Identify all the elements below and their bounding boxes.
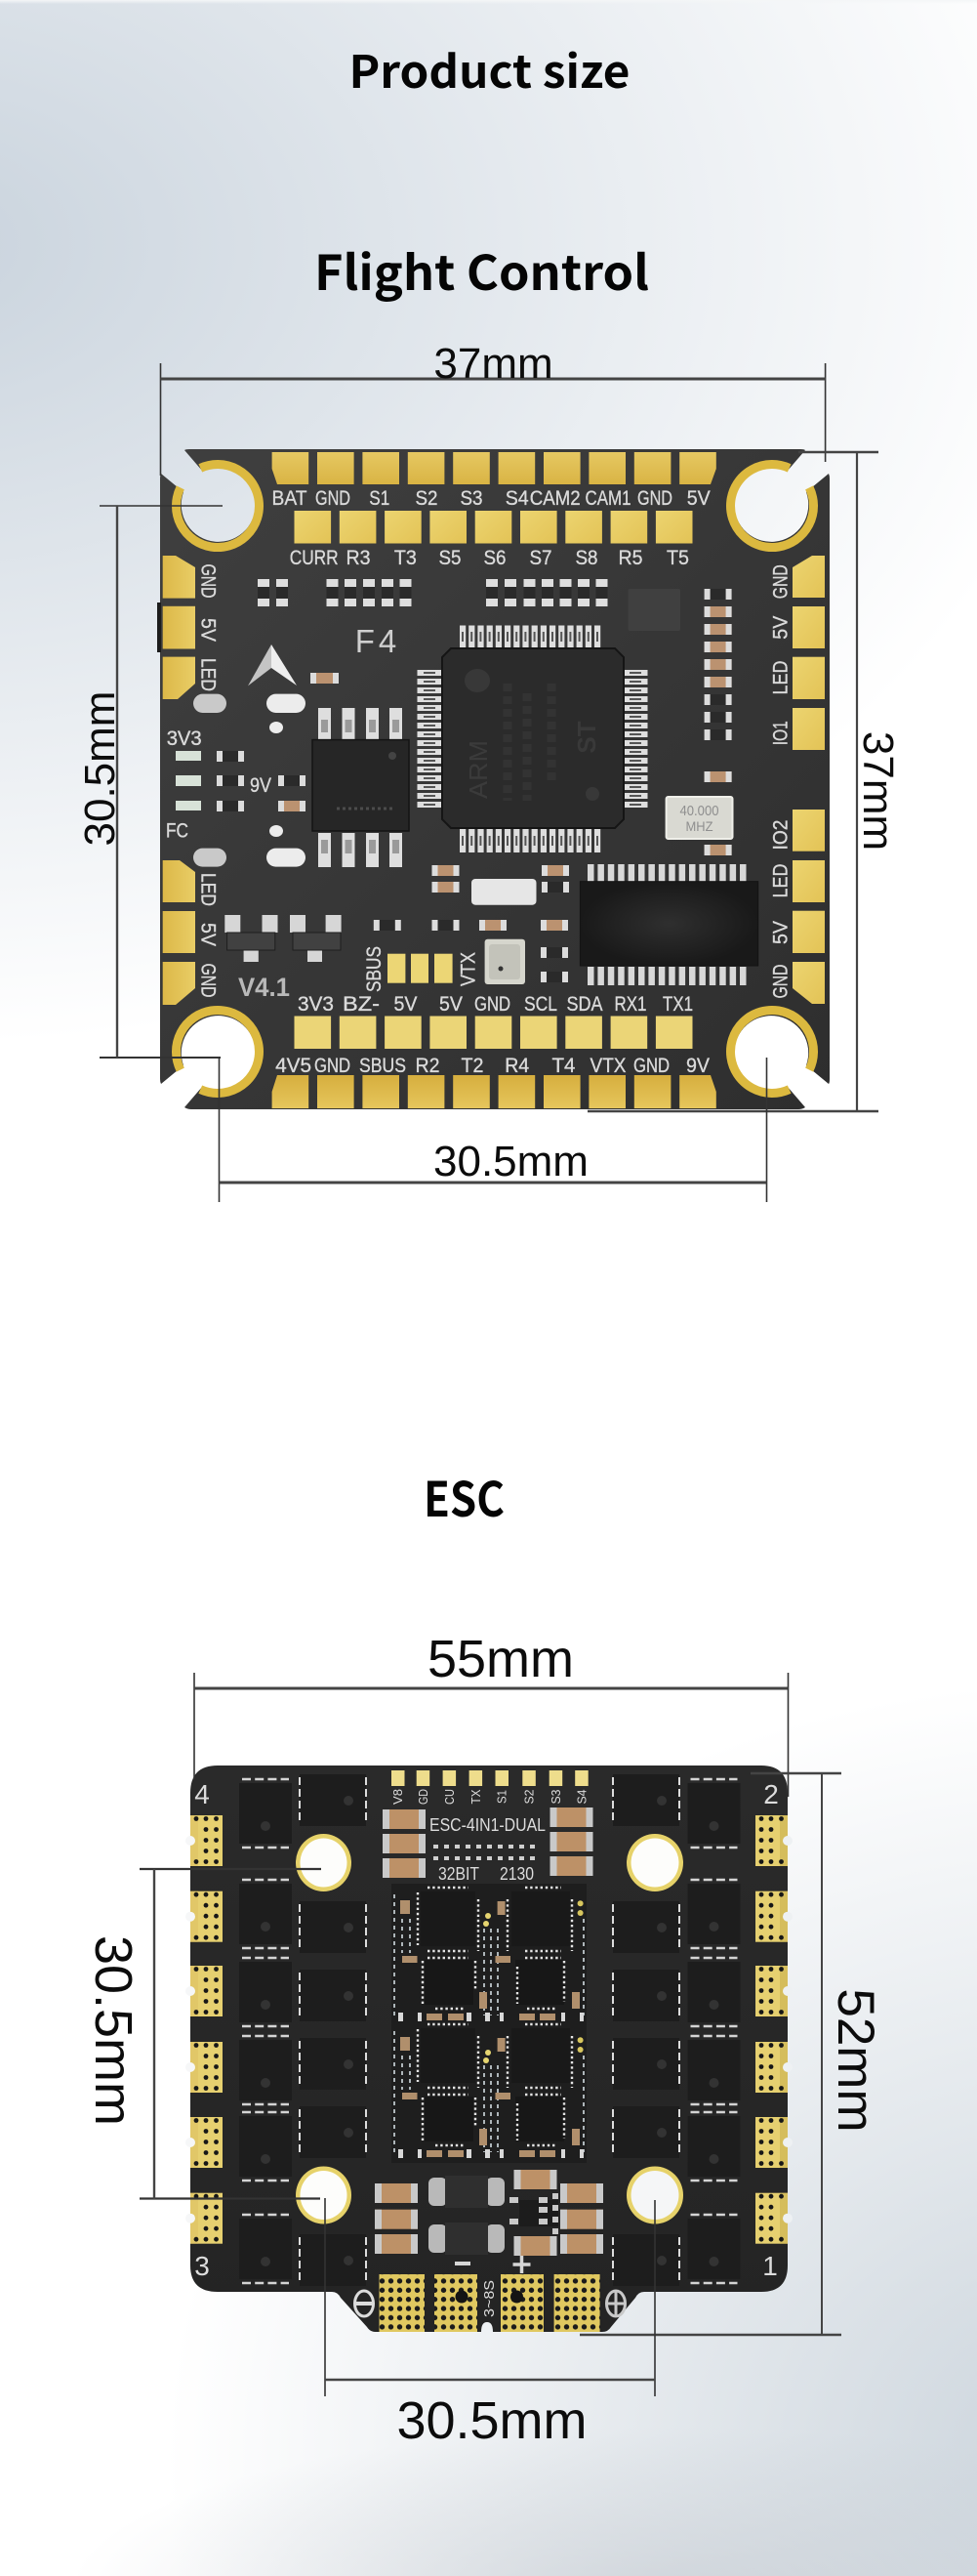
bottom row 3 labels xyxy=(298,993,693,1016)
bottom row 4 labels: VTX xyxy=(590,1055,627,1077)
label 37mm: 37mm xyxy=(433,340,553,388)
top row 2 labels: R5 xyxy=(619,547,642,569)
bottom row 3 labels: SCL xyxy=(524,993,557,1016)
left side labels: GND xyxy=(197,963,219,998)
power solder pads xyxy=(379,2274,600,2332)
MCU chip: ARM xyxy=(464,740,493,799)
barometer sensor xyxy=(485,939,525,984)
top pad row 1 xyxy=(272,452,716,484)
SOT transistor 1 xyxy=(224,915,277,962)
plus label xyxy=(513,2256,531,2273)
top row 1 labels: S4 xyxy=(506,487,529,510)
ESC board outline xyxy=(190,1766,788,2332)
bottom row 3 labels: TX1 xyxy=(663,993,693,1016)
icon: positive terminal xyxy=(607,2291,625,2316)
dimension: top 37mm xyxy=(160,340,826,476)
QFN sensor chip xyxy=(629,589,680,631)
lower capacitors xyxy=(375,2170,603,2256)
32BIT label: 32BIT xyxy=(438,1864,479,1884)
signal pad labels xyxy=(390,1789,590,1805)
bottom row 3 labels: 3V3 xyxy=(298,993,334,1016)
2130 label: 2130 xyxy=(500,1864,534,1884)
top row 1 labels: S3 xyxy=(461,487,482,510)
panel: ESC board xyxy=(185,1766,793,2332)
small resistor rows xyxy=(433,1847,540,1858)
right side labels xyxy=(769,564,793,998)
label 55mm: 55mm xyxy=(427,1630,574,1688)
board outline xyxy=(160,449,830,1109)
bottom row 4 labels: T2 xyxy=(461,1055,484,1077)
bottom row 3 labels: GND xyxy=(474,993,510,1016)
title: Product size: Product size xyxy=(349,37,631,102)
F4 label: F4 xyxy=(355,623,400,659)
icon: brand arrow logo xyxy=(248,644,297,686)
white crystal xyxy=(471,879,537,905)
label left 30.5mm: 30.5mm xyxy=(76,691,124,846)
mounting holes xyxy=(296,1834,683,2224)
motor number 1: 1 xyxy=(762,2251,778,2281)
signal pad labels: S4 xyxy=(574,1789,590,1805)
dimension: right 37mm xyxy=(588,452,902,1111)
top row 1 labels: BAT xyxy=(271,487,307,510)
heading: ESC: ESC xyxy=(424,1462,505,1531)
bottom row 4 labels: GND xyxy=(633,1055,670,1077)
motor number 3: 3 xyxy=(194,2251,210,2281)
regulator chip xyxy=(312,708,409,867)
MCU chip: ST xyxy=(572,721,601,754)
regulator IC xyxy=(509,2193,558,2234)
top capacitors xyxy=(383,1807,593,1878)
left outer MOSFET column xyxy=(239,1779,292,2283)
top row 2 labels: S8 xyxy=(576,547,597,569)
top row 2 labels: S6 xyxy=(484,547,506,569)
bottom row 3 labels: BZ- xyxy=(343,993,380,1016)
central gate driver area xyxy=(391,1884,587,2163)
top row 1 labels: GND xyxy=(637,487,672,510)
right side labels: GND xyxy=(769,965,793,998)
signal pad labels: GD xyxy=(416,1789,430,1805)
top row 2 labels: T3 xyxy=(394,547,417,569)
left side labels: LED xyxy=(197,873,219,906)
top row 2 labels: S5 xyxy=(439,547,461,569)
bottom row 4 labels: T4 xyxy=(552,1055,576,1077)
dimension: bottom 30.5mm xyxy=(219,1058,767,1202)
oscillator 40.000 MHZ: MHZ xyxy=(685,818,713,834)
tan resistor near logo xyxy=(310,673,339,684)
MCU chip xyxy=(429,637,635,841)
bottom row 4 labels: SBUS xyxy=(359,1055,406,1077)
solder ovals xyxy=(193,694,305,867)
label ESC left 30.5mm: 30.5mm xyxy=(84,1935,142,2126)
bottom row 4 labels: R4 xyxy=(505,1055,529,1077)
bottom row 4 labels: 9V xyxy=(686,1055,710,1077)
9V label: 9V xyxy=(250,774,271,797)
top row 1 labels: CAM2 xyxy=(530,487,581,510)
signal pads xyxy=(391,1770,589,1786)
bottom row 4 labels: R2 xyxy=(416,1055,439,1077)
FC label: FC xyxy=(166,820,188,842)
left side labels xyxy=(197,564,219,998)
right motor pads xyxy=(755,1815,793,2244)
top row 1 labels: 5V xyxy=(687,487,711,510)
label 52mm: 52mm xyxy=(827,1988,884,2133)
signal pad labels: CU xyxy=(442,1789,457,1805)
VTX side label: VTX xyxy=(457,952,480,986)
small capacitor row xyxy=(258,579,607,606)
mounting hole rings xyxy=(176,465,814,1093)
status LEDs and small parts xyxy=(176,751,305,811)
bottom row 3 labels: 5V xyxy=(439,993,463,1016)
bottom row 3 labels: SDA xyxy=(566,993,603,1016)
label right 37mm: 37mm xyxy=(854,731,902,851)
oscillator 40.000 MHZ: 40.000 xyxy=(679,803,718,819)
oscillator 40.000 MHZ xyxy=(667,797,732,839)
signal pad labels: S2 xyxy=(521,1789,537,1805)
top row 1 labels: CAM1 xyxy=(586,487,631,510)
dimension: ESC left 30.5mm xyxy=(84,1869,321,2199)
bottom row 3 labels: RX1 xyxy=(615,993,646,1016)
motor number 2: 2 xyxy=(763,1779,779,1809)
V4.1 label: V4.1 xyxy=(238,973,290,1002)
SBUS side label: SBUS xyxy=(363,946,386,992)
left side labels: 5V xyxy=(197,618,219,642)
top pad row 2 xyxy=(295,511,693,543)
panel: flight controller board xyxy=(157,449,830,1109)
large driver chip xyxy=(580,873,758,976)
label bottom 30.5mm: 30.5mm xyxy=(433,1138,589,1185)
three small solder pads xyxy=(387,954,453,983)
top row 2 labels: T5 xyxy=(667,547,689,569)
bottom pad row 3 xyxy=(295,1016,693,1049)
right side labels: GND xyxy=(769,564,793,599)
left side pads xyxy=(163,556,195,1005)
top row 2 labels xyxy=(290,547,689,569)
right side labels: IO1 xyxy=(769,721,793,745)
right side labels: 5V xyxy=(769,616,793,640)
left inner MOSFET column xyxy=(300,1774,366,2286)
top row 1 labels: S2 xyxy=(416,487,437,510)
components under MCU xyxy=(374,865,569,982)
dimension: ESC right 52mm xyxy=(580,1773,884,2335)
left side labels: LED xyxy=(197,658,219,691)
bottom pad row 4 xyxy=(272,1075,716,1108)
right side labels: 5V xyxy=(769,921,793,944)
right side labels: LED xyxy=(769,660,793,695)
edge bump xyxy=(157,602,161,652)
SOT transistor 2 xyxy=(290,915,342,962)
heading: Flight Control: Flight Control xyxy=(314,235,649,305)
diodes xyxy=(428,2176,505,2255)
signal pad labels: TX xyxy=(468,1789,483,1805)
signal pad labels: V8 xyxy=(390,1789,405,1805)
right component column xyxy=(705,589,732,855)
signal pad labels: S1 xyxy=(495,1790,509,1804)
top row 2 labels: R3 xyxy=(346,547,371,569)
bottom row 3 labels: 5V xyxy=(394,993,418,1016)
bottom row 4 labels: GND xyxy=(314,1055,350,1077)
top row 1 labels xyxy=(271,487,711,510)
dimension: ESC bottom 30.5mm xyxy=(325,2198,655,2450)
left side labels: GND xyxy=(197,564,219,598)
right side pads xyxy=(793,556,825,1004)
board name label: ESC-4IN1-DUAL xyxy=(429,1815,546,1835)
right inner MOSFET column xyxy=(613,1774,679,2286)
bottom row 4 labels xyxy=(275,1055,710,1077)
right outer MOSFET column xyxy=(687,1779,740,2283)
signal pad labels: S3 xyxy=(549,1789,563,1805)
voltage label 3~8S: 3~8S xyxy=(481,2280,498,2317)
right side labels: LED xyxy=(769,863,793,898)
right side labels: IO2 xyxy=(769,820,793,850)
dimension: ESC top 55mm xyxy=(194,1630,789,1797)
left motor pads xyxy=(185,1815,223,2244)
icon: negative terminal xyxy=(355,2291,373,2316)
3V3 label: 3V3 xyxy=(167,727,202,750)
left side labels: 5V xyxy=(197,923,219,946)
label ESC bottom 30.5mm: 30.5mm xyxy=(396,2391,588,2450)
motor number 4: 4 xyxy=(194,1779,210,1809)
top row 2 labels: CURR xyxy=(290,547,339,569)
minus label xyxy=(455,2262,470,2265)
top row 1 labels: S1 xyxy=(369,487,389,510)
bottom row 4 labels: 4V5 xyxy=(275,1055,311,1077)
top row 2 labels: S7 xyxy=(529,547,552,569)
top row 1 labels: GND xyxy=(315,487,350,510)
